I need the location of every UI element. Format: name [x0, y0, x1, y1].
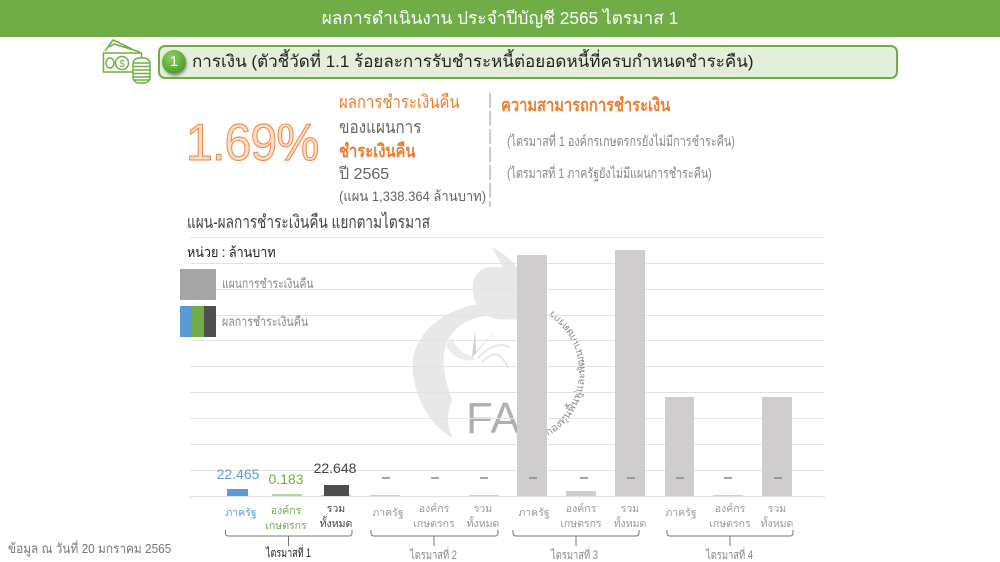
axis category labels: รวม	[327, 503, 345, 515]
watermark logo	[412, 247, 585, 443]
bars	[227, 250, 792, 496]
data date footnote: ข้อมูล ณ วันที่ 20 มกราคม 2565	[8, 541, 171, 556]
axis category labels: รวม	[768, 503, 786, 515]
result text block: ปี 2565	[339, 166, 389, 183]
quarter labels: ไตรมาสที่ 3	[550, 546, 598, 562]
section heading bar	[158, 45, 898, 79]
number badge: 1	[170, 53, 178, 70]
result text block: ของแผนการ	[339, 117, 421, 137]
ability note 2: (ไตรมาสที่ 1 ภาครัฐยังไม่มีแผนการชำระคืน)	[507, 165, 712, 181]
axis category labels: รวม	[621, 503, 639, 515]
title banner	[0, 0, 1000, 37]
ability note 1: (ไตรมาสที่ 1 องค์กรเกษตรกรยังไม่มีการชำระคืน)	[507, 133, 735, 149]
legend: plan	[180, 269, 314, 300]
axis category labels: เกษตรกร	[560, 518, 602, 530]
big percent: 1.69%	[186, 114, 318, 172]
quarter labels: ไตรมาสที่ 2	[409, 546, 457, 562]
result text block: ผลการชำระเงินคืน	[339, 92, 460, 112]
legend: result	[180, 306, 308, 337]
axis category labels: ทั้งหมด	[320, 516, 352, 530]
axis category labels	[225, 502, 793, 532]
axis category labels: ทั้งหมด	[761, 516, 793, 530]
value labels: 0.183	[268, 471, 304, 487]
quarter labels: ไตรมาสที่ 4	[705, 546, 753, 562]
axis category labels: องค์กร	[419, 502, 450, 515]
axis category labels: องค์กร	[566, 502, 597, 515]
axis category labels: องค์กร	[271, 504, 302, 517]
value labels: 22.465	[217, 466, 260, 482]
axis category labels: เกษตรกร	[265, 520, 307, 532]
quarter brackets	[226, 530, 793, 546]
unit label: หน่วย : ล้านบาท	[187, 244, 276, 260]
section heading bar: การเงิน (ตัวชี้วัดที่ 1.1 ร้อยละการรับชำระหนี้ต่อยอดหนี้ที่ครบกำหนดชำระคืน)	[192, 52, 754, 71]
result text block	[338, 92, 486, 204]
axis category labels: รวม	[474, 503, 492, 515]
icon: money and coins: $	[119, 59, 125, 70]
axis category labels: องค์กร	[715, 502, 746, 515]
dash markers	[382, 477, 782, 479]
chart heading: แผน-ผลการชำระเงินคืน แยกตามไตรมาส	[187, 212, 430, 232]
axis category labels: ภาครัฐ	[225, 507, 257, 519]
value labels: 22.648	[314, 460, 357, 476]
legend: plan: แผนการชำระเงินคืน	[222, 276, 314, 291]
ability heading: ความสามารถการชำระเงิน	[501, 95, 670, 115]
axis category labels: ภาครัฐ	[372, 507, 404, 519]
axis category labels: ภาครัฐ	[665, 507, 697, 519]
number badge	[162, 50, 186, 74]
axis category labels: ทั้งหมด	[614, 516, 646, 530]
value labels	[217, 460, 357, 487]
quarter labels: ไตรมาสที่ 1	[265, 544, 311, 560]
dashed divider	[489, 93, 491, 207]
axis category labels: เกษตรกร	[413, 518, 455, 530]
quarter labels	[265, 544, 753, 562]
legend: result: ผลการชำระเงินคืน	[222, 314, 308, 329]
axis category labels: เกษตรกร	[709, 518, 751, 530]
result text block: (แผน 1,338.364 ล้านบาท)	[339, 188, 486, 204]
watermark logo: กองทุนฟื้นฟูและพัฒนาเกษตรกร	[547, 311, 585, 436]
title banner: ผลการดำเนินงาน ประจำปีบัญชี 2565 ไตรมาส 1	[322, 8, 678, 28]
watermark logo: FA	[466, 394, 520, 443]
icon: money and coins	[102, 39, 151, 84]
result text block: ชำระเงินคืน	[339, 141, 415, 161]
axis category labels: ทั้งหมด	[467, 516, 499, 530]
axis category labels: ภาครัฐ	[518, 507, 550, 519]
